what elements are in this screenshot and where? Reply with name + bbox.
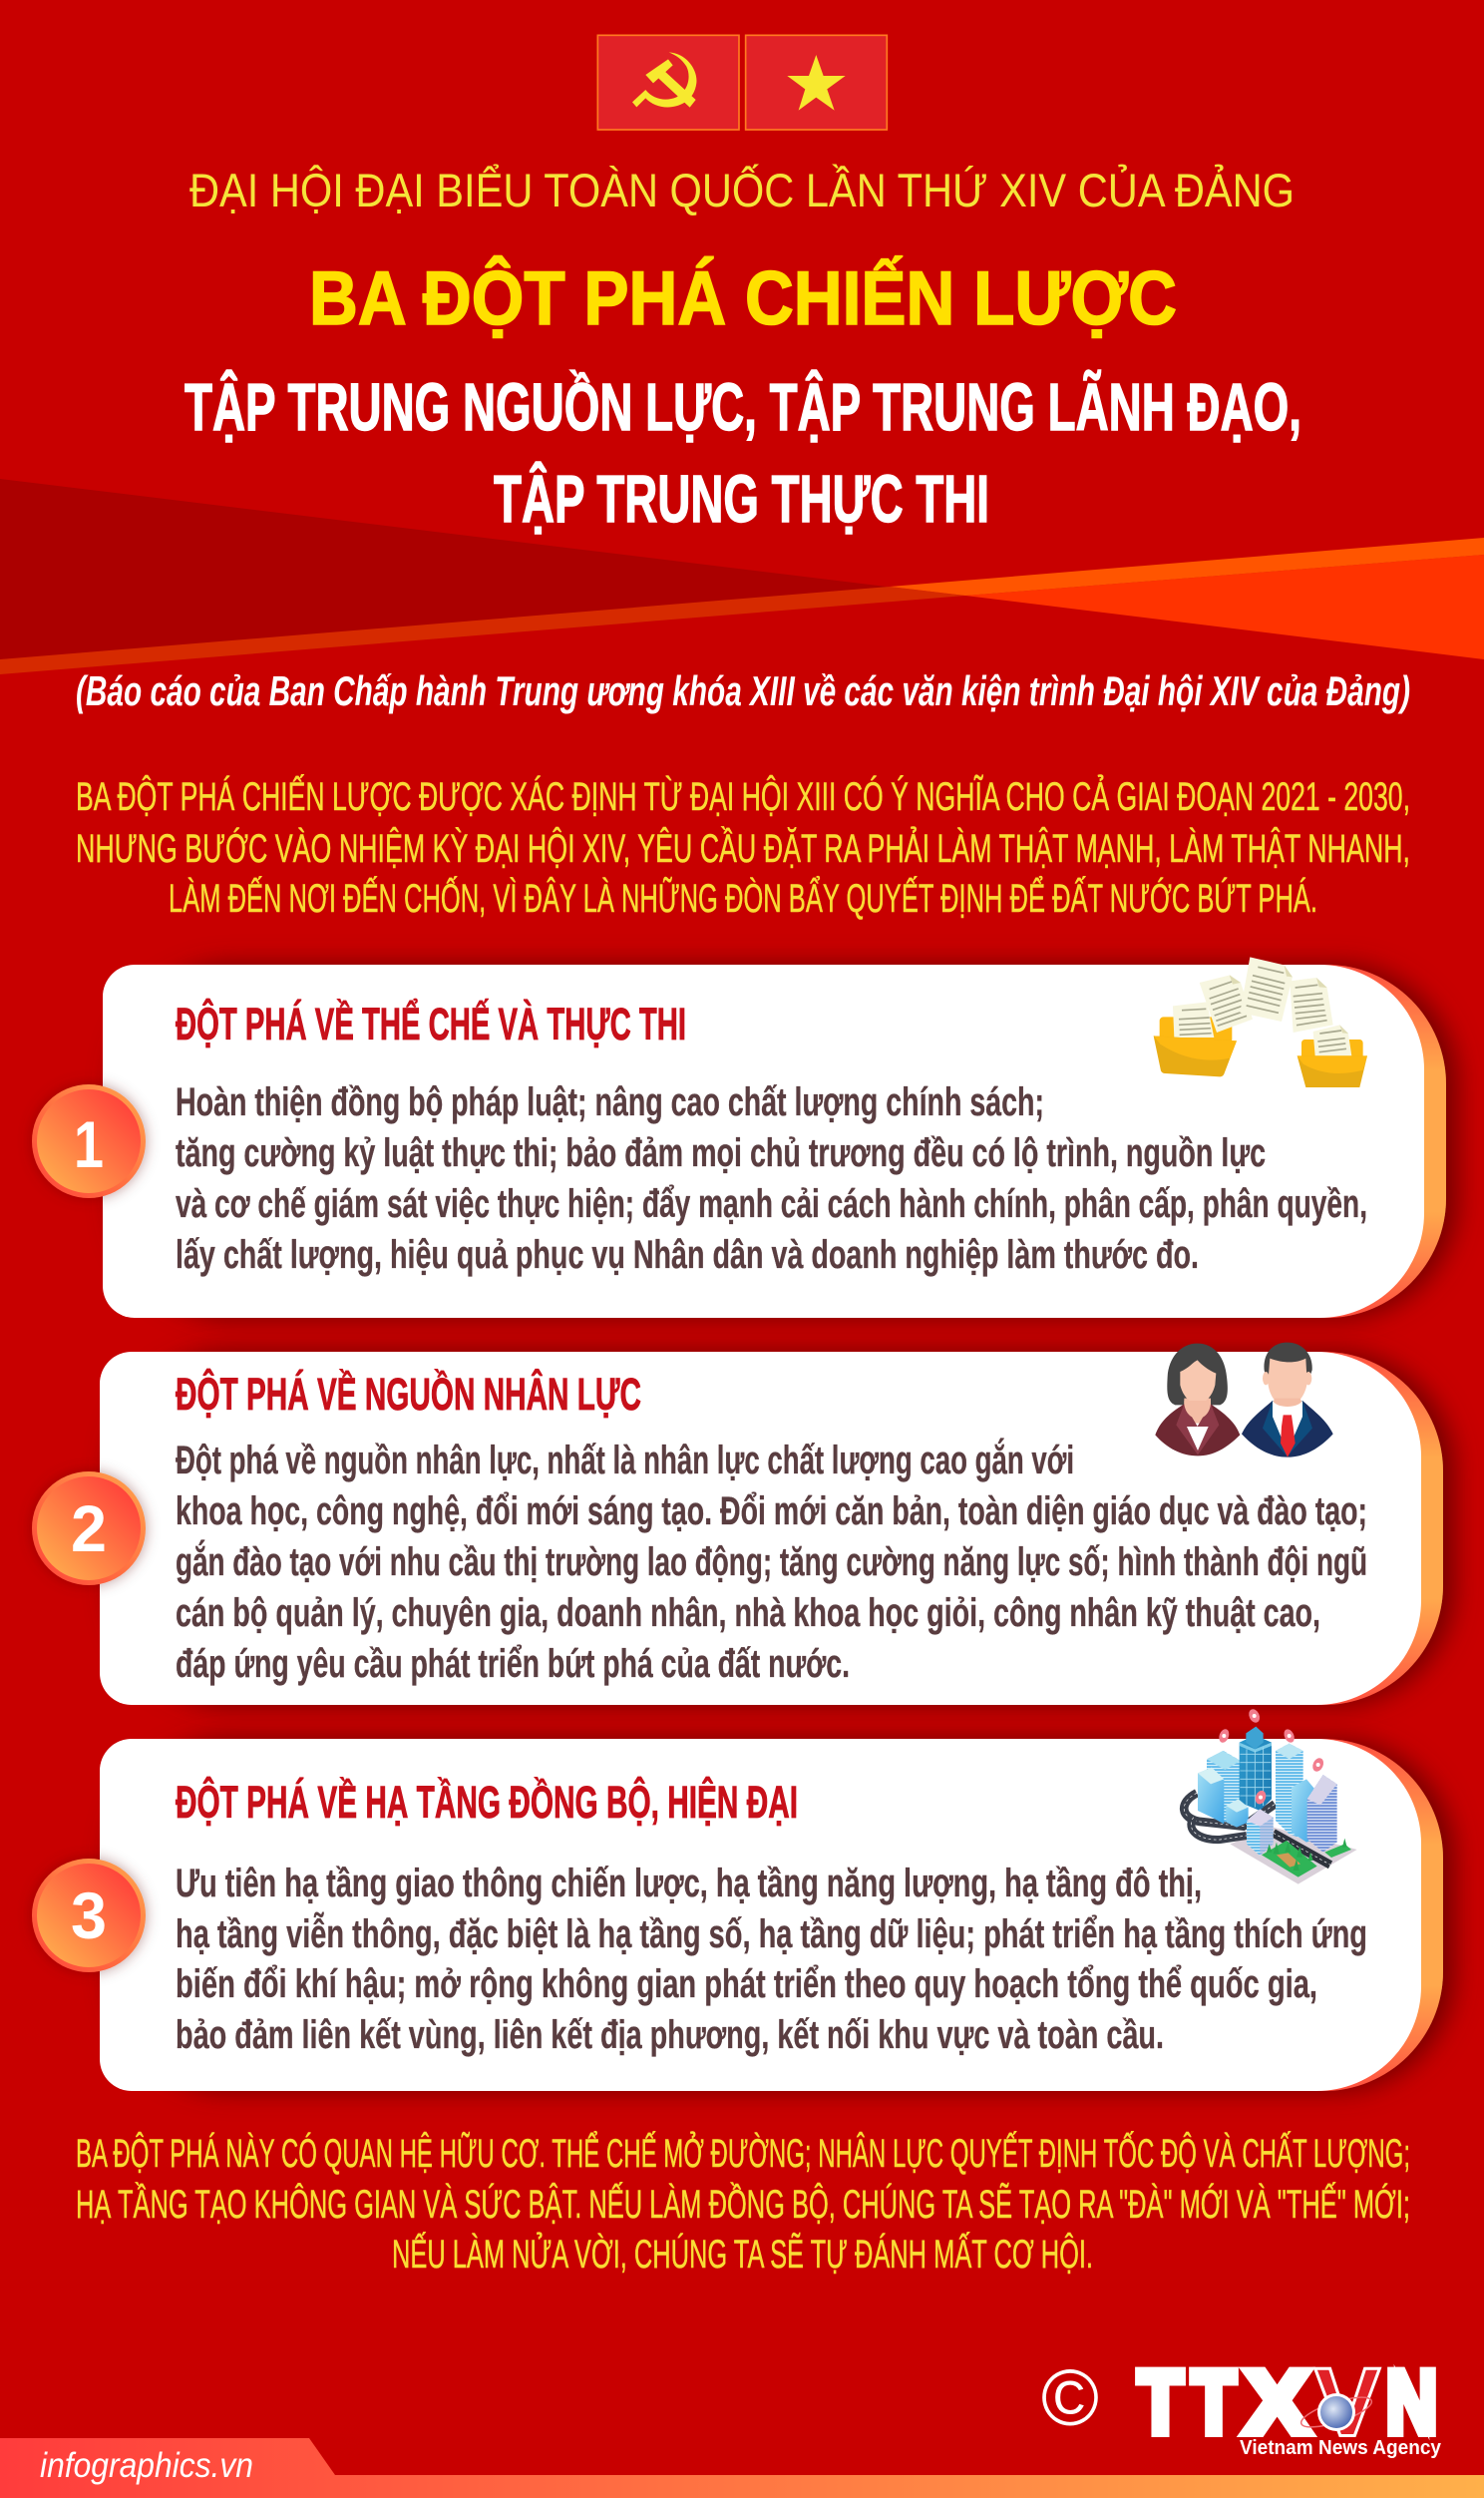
body 1 [176, 1080, 1367, 1277]
number badge 1 [32, 1084, 146, 1198]
decorative ribbons behind the title [0, 479, 1484, 674]
body 2: Đột phá về nguồn nhân lực, nhất là nhân lực chất lượng cao gắn với [176, 1437, 1074, 1482]
body 2 [176, 1437, 1367, 1686]
TTXVN logo: T [1138, 2352, 1183, 2452]
heading 1: ĐỘT PHÁ VỀ THỂ CHẾ VÀ THỰC THI [176, 999, 686, 1049]
number badge 3: 3 [71, 1878, 107, 1952]
globe [1298, 2391, 1374, 2433]
main title: BA ĐỘT PHÁ CHIẾN LƯỢC [309, 256, 1177, 341]
national flag icon [746, 35, 887, 130]
panel 3: infrastructure [100, 1739, 1443, 2091]
TTXVN logo: N [1386, 2352, 1437, 2452]
heading 3: ĐỘT PHÁ VỀ HẠ TẦNG ĐỒNG BỘ, HIỆN ĐẠI [176, 1777, 798, 1828]
subtitle [185, 370, 1301, 537]
number badge 2: 2 [71, 1491, 107, 1565]
number badge 3 [32, 1859, 146, 1972]
website: infographics.vn [40, 2446, 253, 2485]
subtitle: TẬP TRUNG THỰC THI [494, 462, 989, 537]
party flag icon [597, 35, 739, 130]
TTXVN logo: V [1314, 2348, 1380, 2456]
icon: city [1184, 1708, 1357, 1884]
closing paragraph: NẾU LÀM NỬA VỜI, CHÚNG TA SẼ TỰ ĐÁNH MẤT CƠ HỘI. [392, 2231, 1093, 2277]
heading 2: ĐỘT PHÁ VỀ NGUỒN NHÂN LỰC [176, 1369, 641, 1420]
TTXVN logo: T [1192, 2352, 1236, 2452]
intro paragraph [76, 773, 1410, 921]
body 3 [176, 1862, 1367, 2057]
panel 1: institutions [103, 965, 1446, 1318]
icon: two people [1155, 1343, 1333, 1457]
panel 2: human resources [100, 1352, 1443, 1705]
agency tagline: Vietnam News Agency [1240, 2437, 1442, 2459]
closing paragraph [76, 2129, 1410, 2277]
TTXVN logo: X [1245, 2352, 1309, 2452]
congress line: ĐẠI HỘI ĐẠI BIỂU TOÀN QUỐC LẦN THỨ XIV CỦA ĐẢNG [189, 164, 1295, 216]
copyright mark: © [1041, 2353, 1099, 2442]
TTXVN logo [1138, 2348, 1437, 2456]
icon: folders and papers [1154, 957, 1367, 1087]
footer bar [0, 2438, 1484, 2498]
number badge 1: 1 [74, 1107, 104, 1181]
number badge 2 [32, 1471, 146, 1585]
body 2: đáp ứng yêu cầu phát triển bứt phá của đất nước. [176, 1642, 850, 1686]
body 1: Hoàn thiện đồng bộ pháp luật; nâng cao chất lượng chính sách; [176, 1080, 1044, 1124]
